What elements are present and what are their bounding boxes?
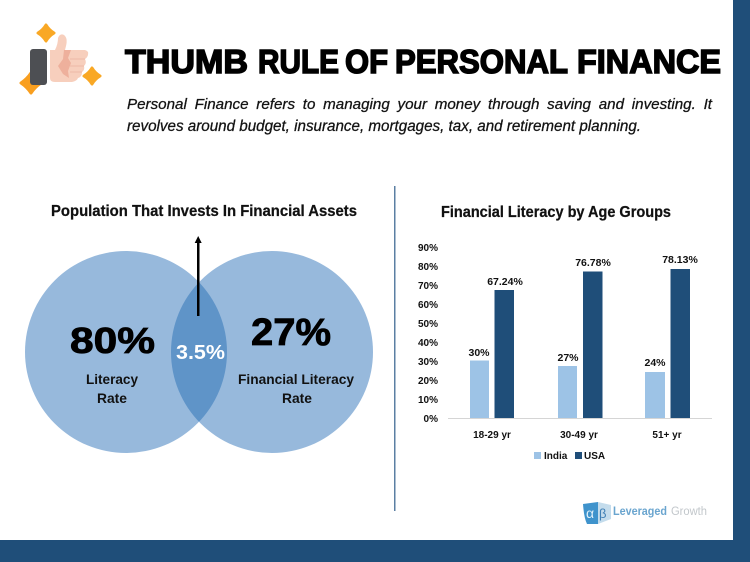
logo: Leveraged Growth: [583, 502, 707, 524]
category labels: 18-29 yr: [473, 430, 511, 441]
title: THUMB: [125, 43, 248, 80]
arrow: [195, 236, 202, 316]
label: financial literacy rate: Rate: [282, 390, 312, 406]
title: [125, 43, 721, 80]
circle: literacy: [25, 251, 227, 453]
value labels: [468, 254, 698, 369]
title: PERSONAL: [395, 43, 568, 80]
overlap: [171, 283, 227, 422]
value: 3.5%: 3.5%: [176, 342, 225, 364]
label: financial literacy rate: [238, 371, 354, 406]
title: FINANCE: [577, 43, 721, 80]
category labels: [473, 430, 682, 441]
value: 80%: 80%: [70, 320, 155, 361]
value labels: 27%: [557, 352, 579, 364]
logo: Leveraged Growth: α: [586, 505, 594, 521]
y axis labels: 80%: [418, 262, 438, 273]
y axis labels: 60%: [418, 300, 438, 311]
India bars: [470, 360, 665, 418]
heading: age groups: Financial Literacy by Age Groups: [441, 204, 671, 221]
y axis labels: 90%: [418, 243, 438, 254]
legend: India: [544, 451, 568, 462]
icon: thumbs up with sparkles: [21, 25, 100, 93]
value labels: 30%: [468, 347, 490, 359]
y axis labels: 70%: [418, 281, 438, 292]
logo: Leveraged Growth: Growth: [671, 506, 707, 518]
value labels: 78.13%: [662, 254, 698, 266]
value labels: 67.24%: [487, 276, 523, 288]
y axis labels: [418, 243, 438, 425]
y axis labels: 10%: [418, 395, 438, 406]
intro text: [127, 96, 713, 135]
y axis labels: 50%: [418, 319, 438, 330]
category labels: 30-49 yr: [560, 430, 598, 441]
value labels: 24%: [644, 357, 666, 369]
label: financial literacy rate: Financial Literacy: [238, 371, 354, 387]
legend: [534, 451, 605, 462]
heading: population: Population That Invests In Financial Assets: [51, 203, 357, 220]
category labels: 51+ yr: [652, 430, 682, 441]
logo: Leveraged Growth: β: [599, 506, 606, 521]
value labels: 76.78%: [575, 257, 611, 269]
bar chart: [418, 243, 712, 462]
legend: USA: [584, 451, 605, 462]
venn diagram: [25, 236, 373, 453]
title: OF: [345, 43, 388, 80]
y axis labels: 30%: [418, 357, 438, 368]
y axis labels: 20%: [418, 376, 438, 387]
y axis labels: 0%: [424, 414, 438, 425]
title: RULE: [258, 43, 339, 80]
logo: Leveraged Growth: Leveraged: [613, 506, 667, 518]
intro text: revolves around budget, insurance, mortgages, tax, and retirement planning.: [127, 118, 641, 135]
label: literacy rate: Rate: [97, 390, 127, 406]
circle: financial literacy: [171, 251, 373, 453]
label: literacy rate: Literacy: [86, 371, 138, 387]
value: 27%: 27%: [251, 312, 331, 354]
USA bars: [494, 269, 690, 418]
y axis labels: 40%: [418, 338, 438, 349]
intro text: Personal Finance refers to managing your money through saving and investing. It: [127, 96, 713, 113]
label: literacy rate: [86, 371, 138, 406]
divider: [394, 186, 396, 511]
